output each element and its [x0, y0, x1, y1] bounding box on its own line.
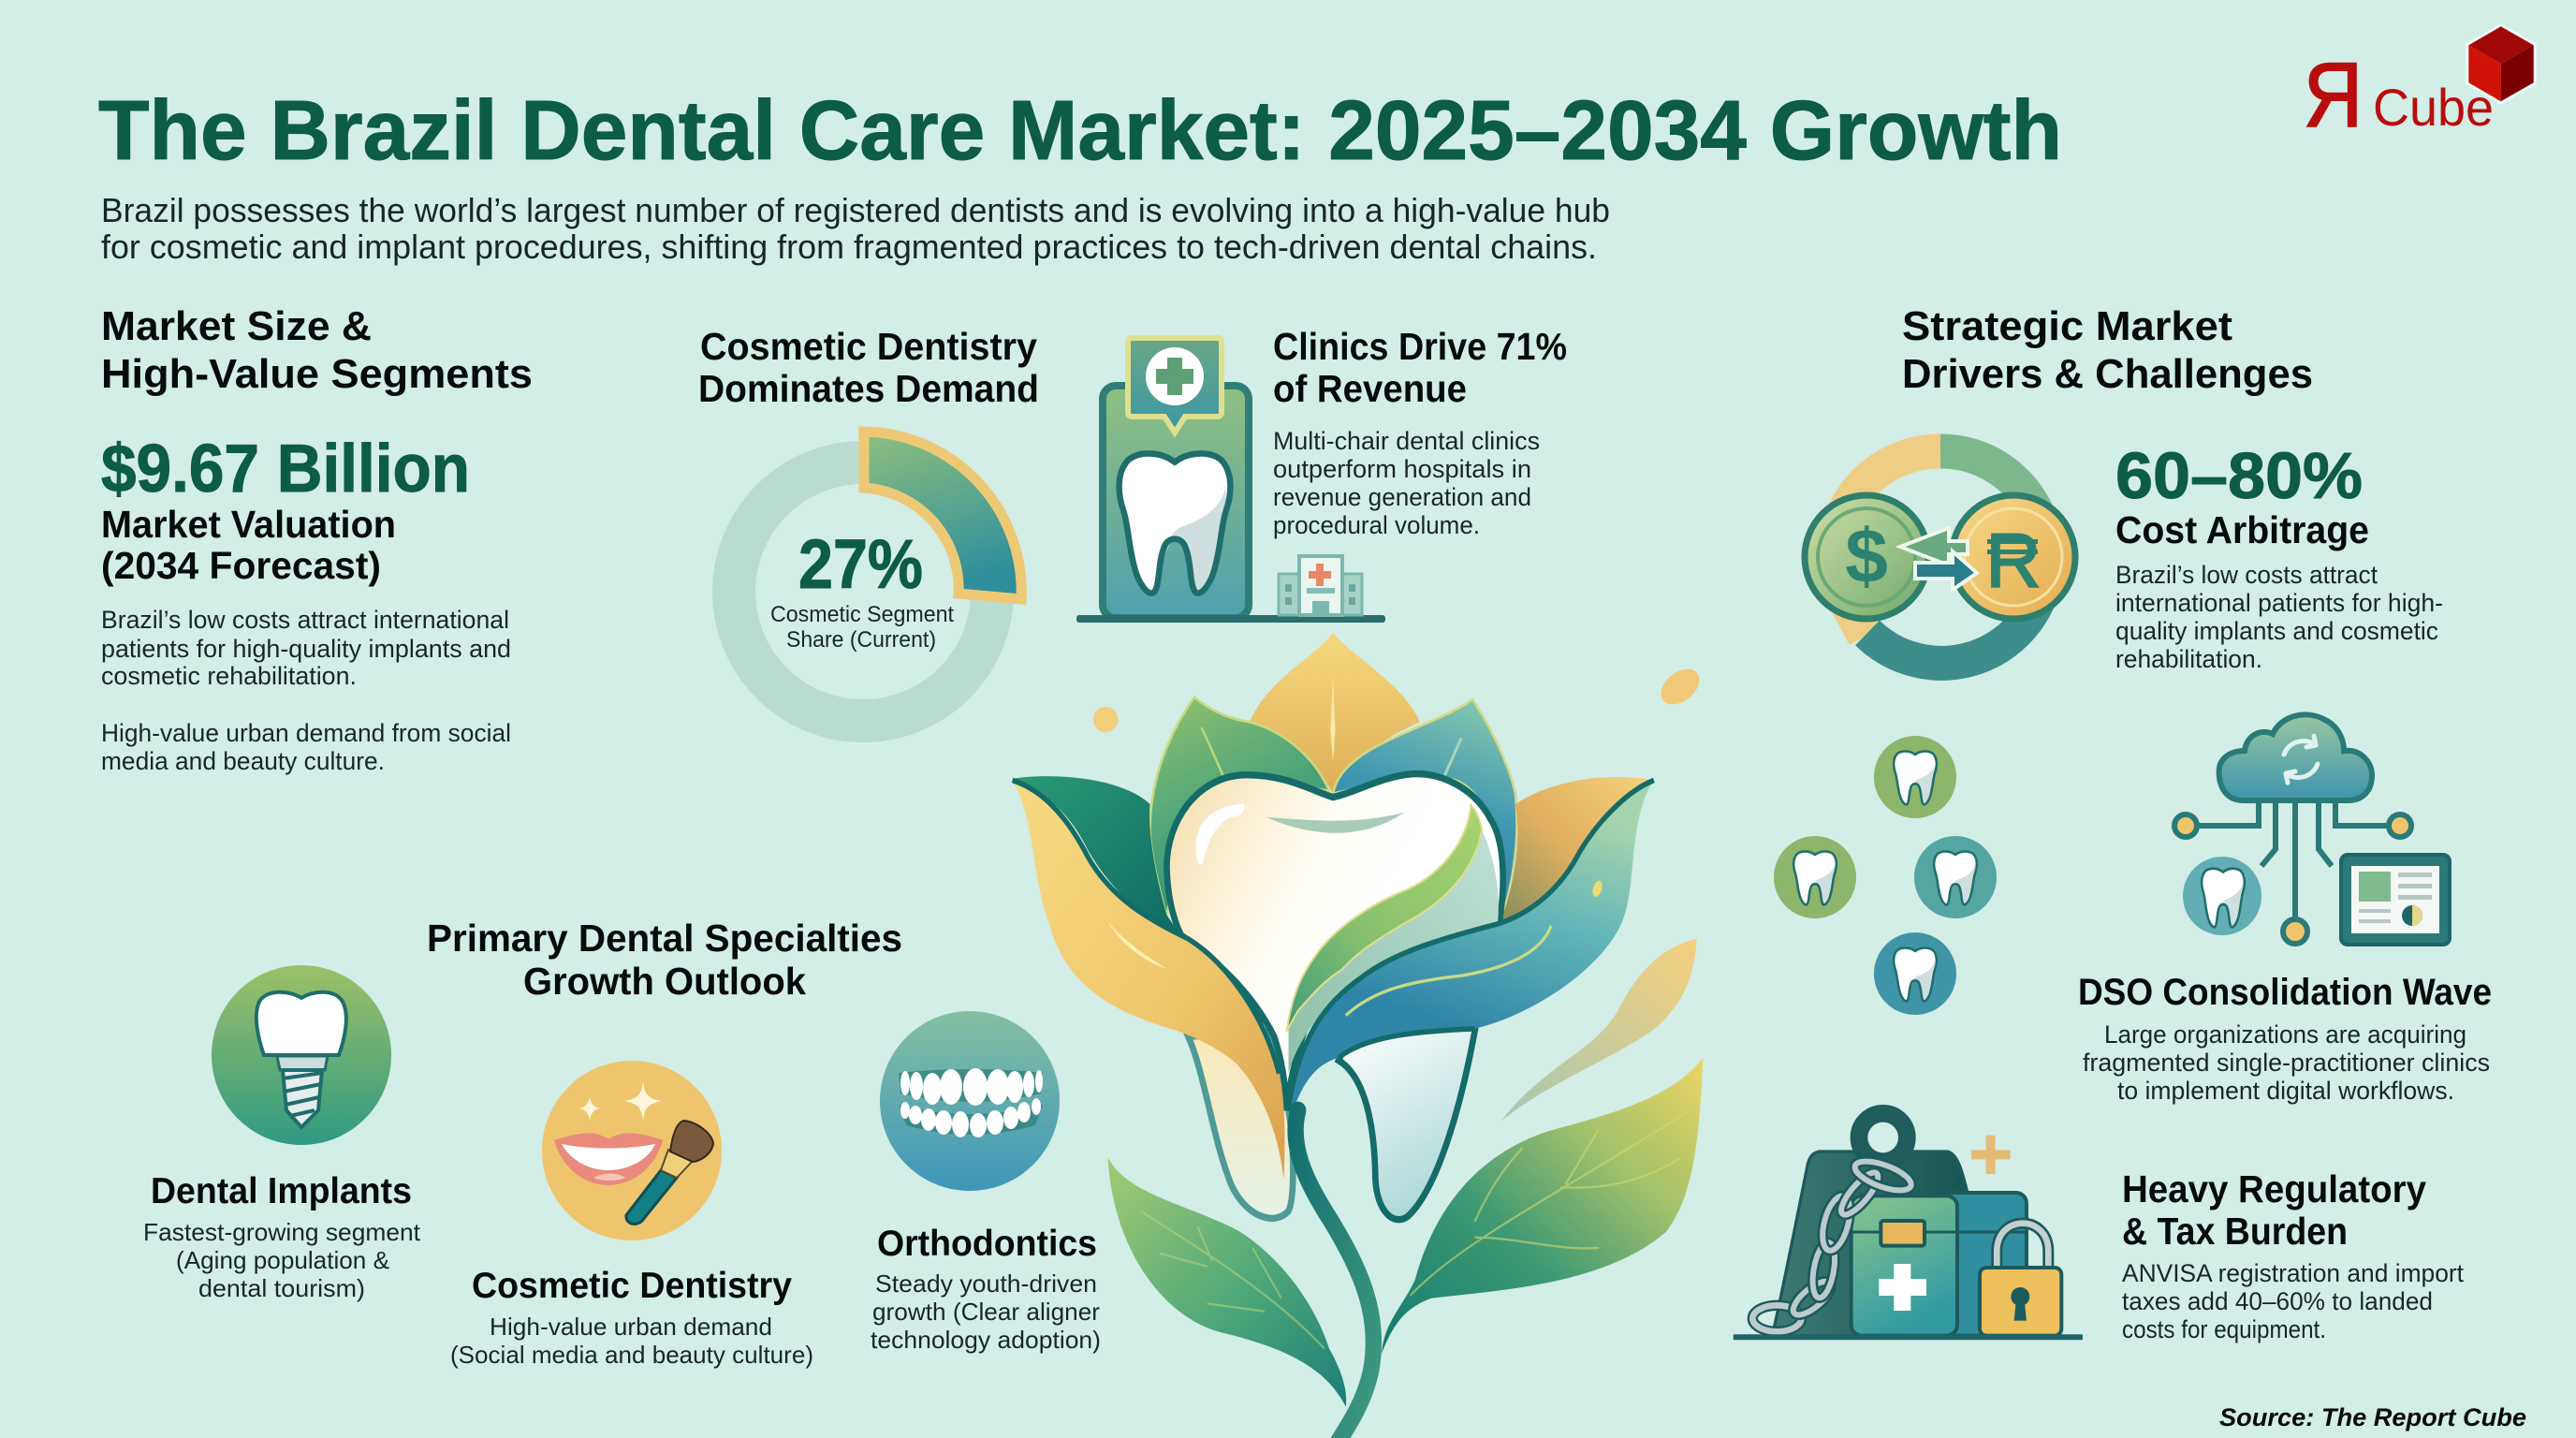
- text: clinics drive revenue: Clinics Drive 71%: [1273, 325, 1567, 368]
- ring segments: [1834, 451, 2039, 663]
- text: dental implants: [143, 1171, 421, 1302]
- icon: hospital: [1279, 556, 1362, 615]
- stat: market valuation: (2034 Forecast): [101, 544, 381, 587]
- heading: cosmetic dentistry: Cosmetic Dentistry: [700, 325, 1037, 368]
- donut chart: 27%: 27%: [798, 525, 923, 603]
- text: orthodontics: Orthodontics: [877, 1224, 1097, 1264]
- text: cost arbitrage: Brazil’s low costs attract: [2115, 561, 2378, 589]
- heading: market size: [101, 303, 533, 397]
- coin: real: R: [1985, 519, 2042, 604]
- text: cost arbitrage: [2115, 439, 2443, 673]
- text: cost arbitrage: international patients for high-: [2115, 589, 2443, 617]
- tooth crown: [1166, 774, 1503, 1110]
- text: dental implants: dental tourism): [198, 1274, 365, 1302]
- leaf: lower left: [1108, 1157, 1346, 1406]
- text: clinics drive revenue: Multi-chair dental clinics: [1273, 427, 1540, 455]
- petal: top yellow: [1250, 632, 1420, 794]
- logo: RCube: [2304, 26, 2534, 146]
- petal: far left dark green: [1013, 776, 1181, 936]
- heading: specialties: Growth Outlook: [523, 960, 806, 1003]
- text: dental implants: (Aging population &: [176, 1246, 389, 1274]
- icon: cosmetic smile and brush: [542, 1061, 722, 1240]
- text: orthodontics: technology adoption): [871, 1326, 1101, 1354]
- text: orthodontics: [871, 1224, 1101, 1354]
- text: clinics drive revenue: of Revenue: [1273, 367, 1467, 410]
- icon: regulatory weight and lock: [1734, 1113, 2083, 1340]
- text: DSO consolidation: fragmented single-practitioner clinics: [2083, 1049, 2490, 1077]
- logo: RCube: Я: [2304, 44, 2363, 146]
- tooth root: right: [1339, 1026, 1476, 1220]
- text: DSO consolidation: to implement digital workflows.: [2117, 1077, 2454, 1105]
- heading: cosmetic dentistry: Dominates Demand: [698, 367, 1039, 410]
- text: clinics drive revenue: revenue generation and: [1273, 483, 1531, 511]
- text: orthodontics: Steady youth-driven: [875, 1269, 1097, 1298]
- text: cost arbitrage: quality implants and cosmetic: [2115, 617, 2438, 645]
- icon: tooth circles: [1774, 736, 1997, 1015]
- text: market notes: patients for high-quality implants and: [101, 635, 511, 663]
- icon: currency exchange: [1805, 451, 2075, 663]
- heading: strategic drivers: Drivers & Challenges: [1902, 351, 2313, 397]
- swirl: teal shade: [1289, 830, 1499, 1074]
- coin: dollar: $: [1845, 514, 1888, 599]
- heading: market size: High-Value Segments: [101, 351, 533, 397]
- ground line: [1734, 1334, 2083, 1340]
- text: clinics drive revenue: outperform hospitals in: [1273, 455, 1531, 483]
- text: regulatory burden: & Tax Burden: [2122, 1210, 2348, 1253]
- coin: dollar: [1805, 495, 1928, 619]
- icon: orthodontic teeth: [880, 1011, 1060, 1191]
- text: DSO consolidation: [2078, 972, 2492, 1105]
- text: market notes: High-value urban demand from social: [101, 719, 511, 747]
- icon: floating dot: [1093, 707, 1118, 732]
- text: cosmetic dentistry: (Social media and beauty culture): [450, 1341, 813, 1369]
- icon: clinic building: [1076, 338, 1385, 623]
- illustration: tooth flower: [1013, 632, 1705, 1438]
- text: market notes: media and beauty culture.: [101, 747, 385, 775]
- text: dental implants: Fastest-growing segment: [143, 1218, 421, 1246]
- swirl: green stripe: [1286, 805, 1482, 1032]
- text: cost arbitrage: rehabilitation.: [2115, 645, 2262, 673]
- logo: RCube: Cube: [2373, 78, 2494, 137]
- swirl: yellow wrap: [1013, 780, 1284, 1180]
- text: clinics drive revenue: [1273, 325, 1567, 539]
- donut chart: 27%: Cosmetic Segment: [770, 602, 954, 627]
- icon: tablet: [2341, 855, 2450, 945]
- text: regulatory burden: taxes add 40–60% to landed: [2122, 1287, 2433, 1315]
- subtitle: [101, 191, 1610, 266]
- leaf: lower right: [1382, 1058, 1703, 1354]
- subtitle: for cosmetic and implant procedures, shifting from fragmented practices to tech-driven dental chains.: [101, 227, 1597, 266]
- plus sign: [1971, 1136, 2011, 1174]
- weight: [1772, 1113, 1982, 1336]
- source note: Source: The Report Cube: [2219, 1403, 2526, 1431]
- subtitle: Brazil possesses the world’s largest number of registered dentists and is evolving into a high-value hub: [101, 191, 1610, 229]
- text: market notes: Brazil’s low costs attract international: [101, 606, 509, 634]
- text: regulatory burden: costs for equipment.: [2122, 1315, 2326, 1343]
- tooth root: left: [1188, 1032, 1293, 1218]
- heading: strategic drivers: Strategic Market: [1902, 303, 2232, 349]
- text: orthodontics: growth (Clear aligner: [872, 1298, 1100, 1326]
- petal: left green: [1150, 697, 1329, 917]
- text: cost arbitrage: 60–80%: [2115, 439, 2363, 512]
- text: cosmetic dentistry: Cosmetic Dentistry: [472, 1266, 792, 1306]
- arrow: to real: [1915, 551, 1977, 590]
- text: clinics drive revenue: procedural volume.: [1273, 511, 1480, 539]
- stat: market valuation: Market Valuation: [101, 503, 396, 546]
- stem: [1295, 1110, 1373, 1438]
- text: DSO consolidation: DSO Consolidation Wave: [2078, 972, 2492, 1013]
- text: cosmetic dentistry: [450, 1266, 813, 1369]
- padlock: [1980, 1224, 2061, 1336]
- icon: dental implant: [212, 965, 391, 1145]
- text: regulatory burden: ANVISA registration and import: [2122, 1259, 2464, 1287]
- text: market notes: [101, 606, 511, 775]
- teal case: [1931, 1193, 2027, 1336]
- text: cost arbitrage: Cost Arbitrage: [2115, 508, 2369, 551]
- heading: strategic drivers: [1902, 303, 2313, 397]
- title: The Brazil Dental Care Market: 2025–2034 Growth: [98, 84, 2062, 178]
- chain: [1752, 1155, 1914, 1331]
- donut chart: 27%: [734, 432, 1021, 721]
- text: cosmetic dentistry: High-value urban demand: [490, 1313, 772, 1341]
- text: DSO consolidation: Large organizations are acquiring: [2104, 1020, 2466, 1049]
- icon: floating seed: [1655, 662, 1705, 712]
- text: dental implants: Dental Implants: [151, 1171, 412, 1211]
- swirl: blue wrap: [1289, 780, 1654, 1129]
- petal: right blue: [1333, 699, 1516, 920]
- icon: cloud network: [2174, 714, 2450, 945]
- heading: specialties: Primary Dental Specialties: [427, 917, 902, 960]
- heading: market size: Market Size &: [101, 303, 372, 349]
- text: regulatory burden: Heavy Regulatory: [2122, 1167, 2426, 1211]
- text: regulatory burden: [2122, 1167, 2464, 1343]
- heading: cosmetic dentistry: [698, 325, 1039, 410]
- arrow: to dollar: [1900, 528, 1968, 565]
- stat: market valuation: $9.67 Billion: [101, 432, 470, 506]
- leaf: wisp: [1501, 939, 1697, 1122]
- text: market notes: cosmetic rehabilitation.: [101, 662, 357, 690]
- heading: specialties: [427, 917, 902, 1003]
- green case: [1852, 1196, 2025, 1336]
- stat: market valuation: [101, 432, 470, 587]
- donut chart: 27%: Share (Current): [786, 627, 936, 653]
- coin: real: [1952, 495, 2075, 619]
- petal: far right yellow: [1496, 777, 1654, 932]
